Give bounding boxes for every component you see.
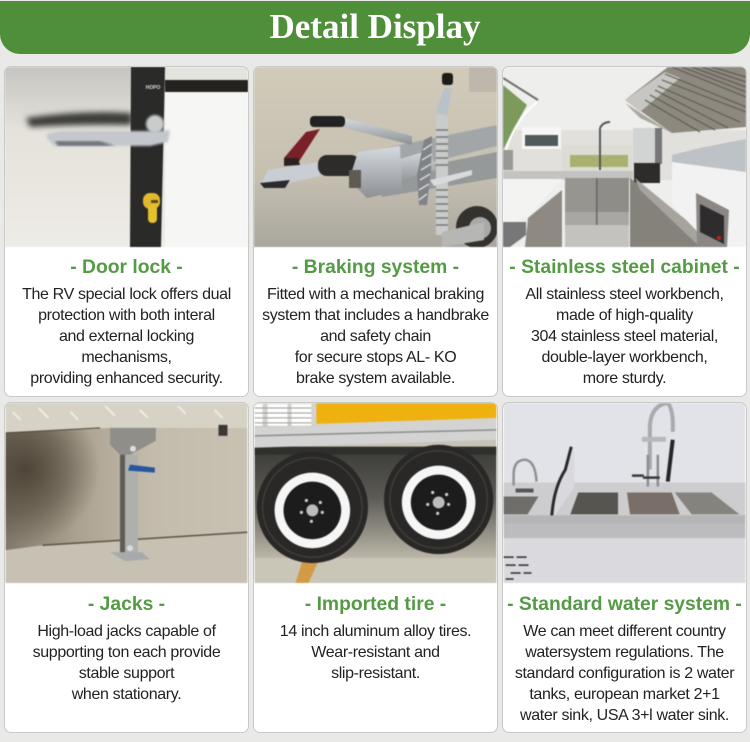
description <box>262 286 489 387</box>
panel: jacks <box>5 403 248 732</box>
photo: door lock: HOPO <box>146 85 160 91</box>
description: stable support <box>79 665 174 682</box>
description: 304 stainless steel material, <box>531 328 718 345</box>
photo: dual axle tires <box>254 403 497 584</box>
description: water sink, USA 3+l water sink. <box>520 707 729 724</box>
caption: standard water system <box>507 594 742 724</box>
heading: - Standard water system - <box>507 594 742 615</box>
heading: - Jacks - <box>88 594 165 615</box>
photo: stainless sinks <box>503 403 746 584</box>
description: High-load jacks capable of <box>37 623 216 640</box>
title banner <box>0 1 750 54</box>
description: standard configuration is 2 water <box>515 665 734 682</box>
panel: door lock <box>5 67 248 396</box>
description: supporting ton each provide <box>33 644 220 661</box>
description: Wear-resistant and <box>311 644 440 661</box>
heading: - Imported tire - <box>305 594 446 615</box>
photo: door lock <box>5 67 248 248</box>
description: 14 inch aluminum alloy tires. <box>280 623 471 640</box>
description: brake system available. <box>296 370 455 387</box>
description: All stainless steel workbench, <box>525 286 724 303</box>
description: tanks, european market 2+1 <box>529 686 720 703</box>
photo: support jack <box>5 403 248 584</box>
description: The RV special lock offers dual <box>22 286 231 303</box>
description: Fitted with a mechanical braking <box>267 286 484 303</box>
description: and safety chain <box>320 328 431 345</box>
description: watersystem regulations. The <box>525 644 724 661</box>
panel: imported tire <box>254 403 497 732</box>
heading: - Stainless steel cabinet - <box>509 257 740 278</box>
description: more sturdy. <box>583 370 666 387</box>
description: made of high-quality <box>556 307 693 324</box>
description <box>280 623 471 682</box>
photo: trailer coupling and brake <box>254 67 497 248</box>
description: for secure stops AL- KO <box>295 349 456 366</box>
description: and external locking <box>59 328 194 345</box>
description: protection with both interal <box>38 307 215 324</box>
description: when stationary. <box>72 686 181 703</box>
description: We can meet different country <box>523 623 726 640</box>
description <box>33 623 220 703</box>
heading: - Door lock - <box>70 257 183 278</box>
heading: - Braking system - <box>292 257 459 278</box>
caption: stainless steel cabinet <box>509 257 740 387</box>
caption: imported tire <box>280 594 471 682</box>
description <box>22 286 231 387</box>
photo: kitchen interior <box>503 67 746 248</box>
title banner: Detail Display <box>270 7 480 46</box>
caption: braking system <box>262 257 489 387</box>
panel: stainless steel cabinet <box>503 67 746 396</box>
description: mechanisms, <box>81 349 172 366</box>
description: system that includes a handbrake <box>262 307 489 324</box>
description: double-layer workbench, <box>541 349 708 366</box>
panel: braking system <box>254 67 497 396</box>
description <box>515 623 734 724</box>
description: slip-resistant. <box>331 665 420 682</box>
panel: standard water system <box>503 403 746 732</box>
description <box>525 286 724 387</box>
caption: door lock <box>22 257 231 387</box>
caption: jacks <box>33 594 220 703</box>
description: providing enhanced security. <box>30 370 223 387</box>
